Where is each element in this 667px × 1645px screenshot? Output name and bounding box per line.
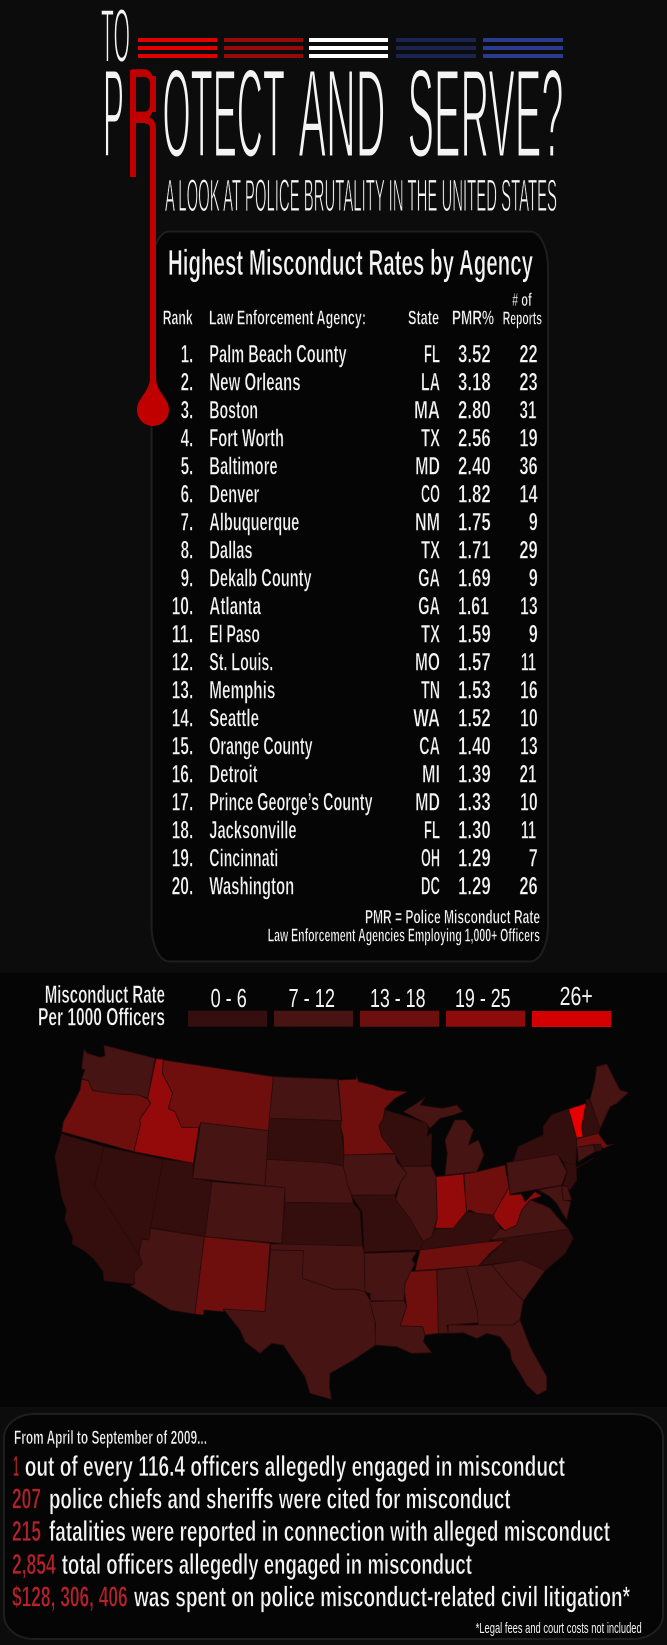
legend item 0-6 [188,983,267,1027]
row 9: Dekalb County [209,565,312,593]
row 13: Memphis [209,677,275,705]
row 14: 14. [172,705,193,733]
row 18: Jacksonville [209,817,297,845]
row 9: 9. [181,565,193,593]
row 3: 3. [181,397,193,425]
row 14: Seattle [209,705,259,733]
row 11 [172,621,538,649]
row 10: 1.61 [458,593,489,621]
row 7 [181,509,538,537]
row 5: MD [415,453,440,481]
panel: key statistics [4,1414,663,1639]
legend item 0-6: 0 - 6 [211,983,247,1013]
row 12: 1.57 [458,649,491,677]
row 13: 16 [520,677,538,705]
row 2 [181,369,538,397]
row 8: 8. [181,537,193,565]
row 16: 1.39 [458,761,491,789]
row 15: Orange County [209,733,313,761]
row 11: 11. [172,621,193,649]
row 12 [172,649,536,677]
row 18 [172,817,536,845]
row 13: TN [421,677,440,705]
row 3: 2.80 [458,397,491,425]
row 8: TX [421,537,440,565]
row 1: 3.52 [458,341,491,369]
legend item 13-18 [360,983,439,1027]
legend item 7-12: 7 - 12 [288,983,335,1013]
row 9: 1.69 [458,565,491,593]
row 19: OH [421,845,440,873]
row 19: 7 [529,845,538,873]
row 1: 22 [519,341,538,369]
row 20: 1.29 [458,873,491,901]
row 20 [172,873,538,901]
row 3: 31 [520,397,537,425]
row 18: 18. [172,817,193,845]
icon: blood drop [137,378,169,426]
stat: 1 out of every 116.4: 1 [13,1451,19,1483]
row 7: 7. [181,509,193,537]
stat: 215 fatalities: 215 [12,1516,41,1548]
row 3 [181,397,537,425]
row 9: 9 [529,565,538,593]
row 1: Palm Beach County [209,341,347,369]
row 5: 2.40 [458,453,491,481]
row 17: 17. [172,789,193,817]
row 7: 9 [529,509,538,537]
row 12: 12. [172,649,193,677]
row 7: 1.75 [458,509,491,537]
row 19: 1.29 [458,845,491,873]
title: To Protect and Serve? [101,0,564,426]
row 8: 29 [519,537,538,565]
row 16: 21 [520,761,537,789]
table column headers: Law Enforcement Agency: [209,307,366,329]
row 5: 5. [181,453,193,481]
row 14: WA [413,705,440,733]
row 15: 1.40 [458,733,491,761]
legend title: Misconduct Rate [45,981,165,1009]
row 1: 1. [181,341,193,369]
row 8 [181,537,538,565]
row 13: 13. [172,677,193,705]
stat: civil litigation cost: $128, 306, 406 [12,1582,128,1614]
row 16 [172,761,537,789]
row 2: 2. [181,369,193,397]
row 11: 9 [529,621,538,649]
row 5: Baltimore [209,453,278,481]
row 20: Washington [209,873,294,901]
blood line over panel edge [150,231,156,383]
row 12: St. Louis. [209,649,273,677]
row 3: MA [414,397,440,425]
row 12: MO [415,649,440,677]
row 4: 2.56 [458,425,491,453]
row 10: 10. [172,593,193,621]
row 4: TX [421,425,440,453]
table column headers: # of [512,290,532,310]
row 3: Boston [209,397,258,425]
row 11: 1.59 [458,621,491,649]
row 18: 1.30 [458,817,491,845]
table rows [172,341,538,901]
row 8: Dallas [209,537,253,565]
table column headers: Rank [163,307,193,329]
row 15 [172,733,538,761]
row 1 [181,341,538,369]
row 20: 26 [519,873,538,901]
title: To Protect and Serve?: R [128,41,158,185]
legend item 13-18: 13 - 18 [370,983,426,1013]
row 17: 10 [520,789,538,817]
row 20: 20. [172,873,193,901]
heading words: PROTECT AND SERVE?: OTECT [162,43,285,184]
row 19: Cincinnati [209,845,278,873]
statistics intro: From April to September of 2009... [14,1428,207,1449]
row 6 [181,481,538,509]
red letter R with blood drip [128,41,169,426]
stat: 2,854 officers: 2,854 [12,1549,56,1581]
legend title [38,981,165,1032]
table column headers: State [408,307,439,329]
stat: 207 police chiefs: 207 [12,1484,41,1516]
choropleth map of US states [55,1045,628,1399]
row 5: 36 [519,453,538,481]
row 14: 1.52 [458,705,491,733]
row 2: New Orleans [209,369,301,397]
row 18: 11 [521,817,536,845]
table column headers: PMR% [452,307,494,329]
row 2: 23 [519,369,538,397]
row 10: 13 [520,593,538,621]
row 6: Denver [209,481,259,509]
row 6: CO [421,481,440,509]
row 14: 10 [520,705,538,733]
table footnotes: PMR = Police Misconduct Rate [365,907,540,928]
row 2: 3.18 [458,369,491,397]
row 11: TX [421,621,440,649]
row 15: 15. [172,733,193,761]
flag stripes [138,38,563,58]
row 9 [181,565,538,593]
row 4: 4. [181,425,193,453]
legend title: Per 1000 Officers [38,1004,165,1032]
row 12: 11 [521,649,536,677]
row 13 [172,677,538,705]
row 14 [172,705,538,733]
row 4: 19 [519,425,538,453]
row 18: FL [424,817,440,845]
row 13: 1.53 [458,677,491,705]
legend item 7-12 [274,983,353,1027]
row 6: 14 [519,481,538,509]
row 16: 16. [172,761,193,789]
table column headers: Reports [503,309,542,329]
row 4: Fort Worth [209,425,284,453]
row 7: NM [415,509,440,537]
legend item 19-25 [446,983,525,1027]
row 15: 13 [520,733,538,761]
legend item 26+ [532,981,611,1027]
row 6: 6. [181,481,193,509]
row 4 [181,425,538,453]
row 5 [181,453,538,481]
row 19: 19. [172,845,193,873]
row 15: CA [419,733,440,761]
row 8: 1.71 [458,537,491,565]
map legend [38,981,611,1032]
row 17: MD [415,789,440,817]
row 20: DC [421,873,440,901]
heading words: PROTECT AND SERVE?: P [103,43,124,184]
panel: highest misconduct rates table [137,231,548,962]
row 16: MI [422,761,440,789]
row 2: LA [421,369,440,397]
table column headers [163,290,542,329]
row 6: 1.82 [458,481,491,509]
heading words: PROTECT AND SERVE?: AND [298,43,386,184]
row 7: Albuquerque [209,509,299,537]
legend item 26+: 26+ [560,981,593,1011]
row 11: El Paso [209,621,260,649]
row 10: Atlanta [209,593,262,621]
row 17: Prince George’s County [209,789,373,817]
table footnotes [268,907,540,946]
row 10: GA [418,593,440,621]
row 10 [172,593,538,621]
row 17: 1.33 [458,789,491,817]
row 19 [172,845,538,873]
row 9: GA [418,565,440,593]
row 16: Detroit [209,761,258,789]
stat: 2,854 officers [12,1549,472,1581]
row 1: FL [424,341,440,369]
legend item 19-25: 19 - 25 [455,983,511,1013]
